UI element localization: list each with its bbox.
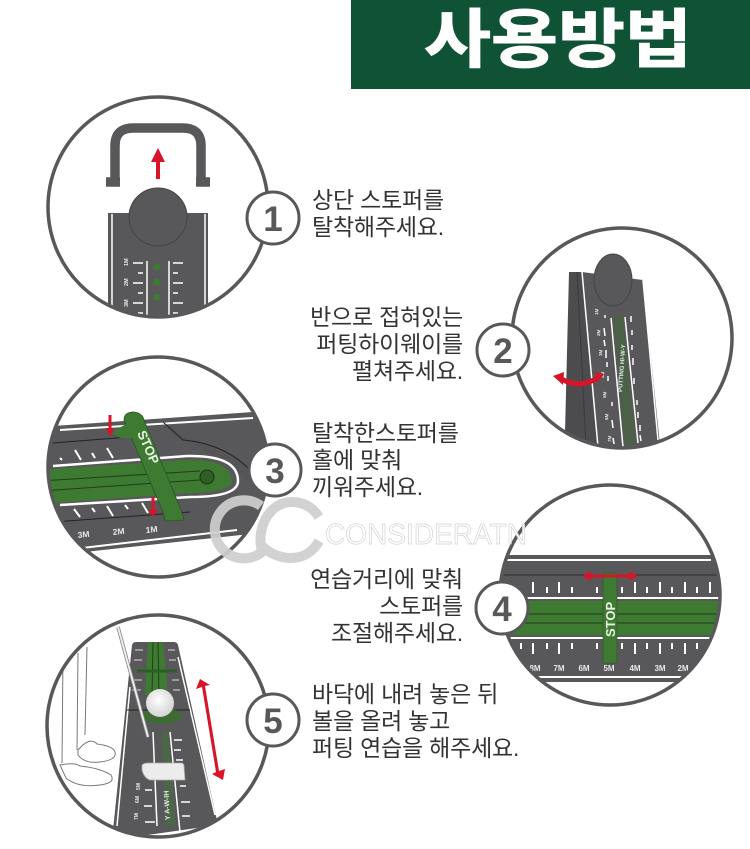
panel: step 2 unfold	[477, 228, 732, 455]
mat: 4M	[629, 664, 641, 673]
mat in perspective: Y A-W-IH	[163, 791, 172, 820]
mat: 3M	[77, 529, 90, 540]
text: step 5	[312, 681, 519, 761]
mat: 1M	[145, 524, 158, 535]
badge 5: 5	[263, 702, 283, 741]
folded mat: 2M	[596, 329, 601, 336]
watermark logo	[215, 500, 527, 558]
mat body: 2M	[124, 278, 130, 286]
stopper	[112, 412, 184, 521]
mat: 6M	[578, 664, 590, 673]
text: step 3	[312, 420, 459, 500]
icon: putter club	[118, 627, 185, 780]
icon: red double arrow	[196, 679, 225, 780]
folded mat: 5M	[602, 391, 607, 398]
icon: stopper cap	[594, 254, 632, 306]
panel: step 4 adjust stopper	[476, 485, 725, 705]
text: step 2: 반으로 접혀있는	[310, 304, 463, 330]
badge 2	[477, 324, 529, 376]
title banner	[351, 0, 750, 89]
folded mat: 3M	[598, 349, 603, 356]
text: step 3: 끼워주세요.	[312, 474, 423, 500]
mat in perspective: 5M	[136, 783, 142, 790]
badge 3: 3	[265, 452, 285, 491]
mat body: 1M	[124, 258, 130, 266]
text: step 1: 상단 스토퍼를	[312, 187, 444, 213]
text: step 2: 퍼팅하이웨이를	[316, 331, 463, 357]
mat in perspective: 6M	[135, 796, 141, 803]
text: step 3: 홀에 맞춰	[312, 447, 402, 473]
text: step 4	[310, 566, 463, 646]
text: step 4: 연습거리에 맞춰	[310, 566, 463, 592]
mat: 2M	[677, 664, 689, 673]
text: step 5: 바닥에 내려 놓은 뒤	[312, 681, 498, 707]
text: step 1: 탈착해주세요.	[312, 214, 444, 240]
folded mat: PUTTING HI-W-Y	[618, 344, 627, 392]
text: step 1	[312, 187, 444, 240]
mat: 3M	[654, 664, 666, 673]
mat: 5M	[603, 664, 615, 673]
text: step 4: 스토퍼를	[379, 593, 463, 619]
text: step 4: 조절해주세요.	[331, 620, 463, 646]
folded mat	[565, 272, 660, 455]
mat: 7M	[553, 664, 565, 673]
mat	[495, 555, 725, 682]
icon: ball cup	[142, 708, 182, 724]
badge 5	[247, 694, 299, 746]
stopper	[603, 573, 618, 663]
mat: 2M	[112, 526, 125, 537]
folded mat: 4M	[600, 371, 605, 378]
badge 4: 4	[492, 590, 512, 629]
panel: step 1 remove stopper	[48, 97, 299, 323]
folded mat: 6M	[604, 413, 609, 420]
panel: step 3 attach stopper	[40, 357, 301, 577]
mat body	[108, 213, 208, 323]
icon: red arrows	[106, 415, 158, 517]
folded mat: 1M	[594, 308, 599, 315]
icon: golfer legs and shoes	[60, 647, 115, 786]
stopper: STOP	[134, 428, 162, 467]
text: step 2: 펼쳐주세요.	[352, 358, 463, 384]
mat body: 3M	[124, 299, 130, 307]
icon: red double arrow	[582, 571, 638, 581]
icon: red up arrow	[151, 148, 165, 179]
badge 2: 2	[493, 332, 513, 371]
badge 1: 1	[263, 200, 283, 239]
text: step 5: 퍼팅 연습을 해주세요.	[312, 735, 519, 761]
text: step 3: 탈착한스토퍼를	[312, 420, 459, 446]
badge 3	[249, 444, 301, 496]
mat	[50, 412, 264, 552]
text: step 5: 볼을 올려 놓고	[312, 708, 450, 734]
text: step 2	[310, 304, 463, 384]
folded mat: 7M	[607, 435, 612, 442]
mat in perspective: 7M	[134, 813, 140, 820]
stopper: STOP	[603, 602, 618, 637]
icon: golf ball	[146, 689, 174, 717]
icon: red curved arrow	[553, 372, 604, 385]
title: 사용방법	[424, 4, 692, 76]
icon: round stopper cap	[129, 188, 187, 246]
badge 4	[476, 582, 528, 634]
mat in perspective	[112, 642, 218, 840]
badge 1	[247, 192, 299, 244]
icon: stopper bracket	[106, 128, 210, 182]
panel: step 5 practice	[47, 615, 299, 840]
mat: 8M	[529, 664, 541, 673]
watermark wordmark: CONSIDERATN	[325, 519, 527, 551]
